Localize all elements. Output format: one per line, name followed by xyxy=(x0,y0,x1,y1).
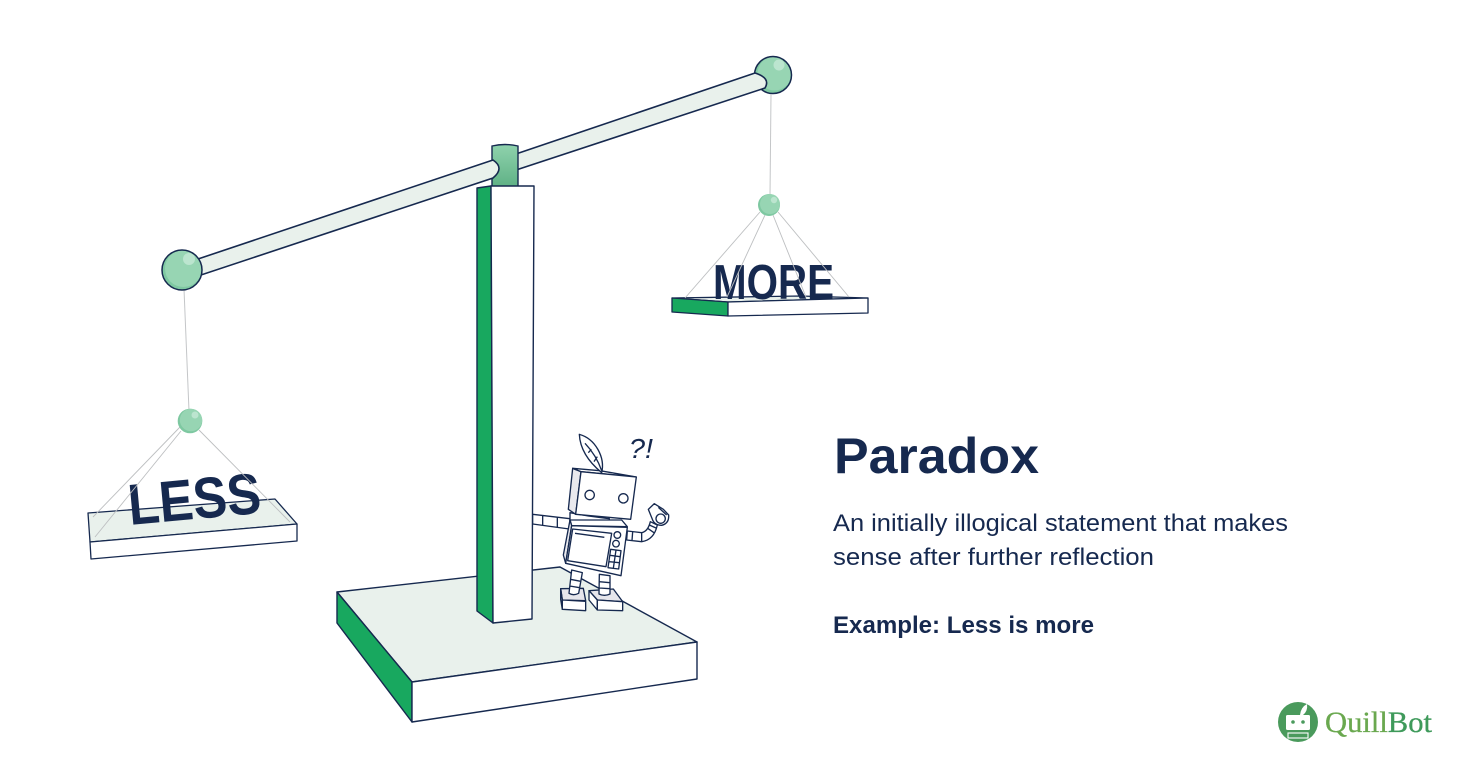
strings: LESS pan xyxy=(93,427,290,537)
scale base xyxy=(337,567,697,722)
word: MORE: MORE xyxy=(713,256,834,310)
definition line two: sense after further reflection xyxy=(833,544,1154,571)
exclamation mark text: ?! xyxy=(629,433,653,464)
robot screen xyxy=(568,529,612,567)
robot right arm xyxy=(627,522,657,542)
pillar xyxy=(477,186,534,623)
QuillBot logo xyxy=(1278,702,1433,742)
robot left foot xyxy=(561,588,586,611)
pan: MORE xyxy=(672,296,868,316)
robot button one xyxy=(614,532,621,538)
right beam arm xyxy=(510,73,767,172)
robot character xyxy=(533,434,669,611)
robot keypad xyxy=(608,549,621,569)
robot neck xyxy=(570,513,609,521)
robot arm reaching to pillar xyxy=(533,514,570,529)
logo badge xyxy=(1278,702,1318,742)
left hanging string xyxy=(184,289,189,411)
right hanging string xyxy=(770,94,771,196)
robot right eye xyxy=(619,494,628,503)
pivot block xyxy=(492,144,518,187)
example line: Example: Less is more xyxy=(833,612,1094,639)
right ball xyxy=(754,56,792,94)
left beam arm xyxy=(195,160,499,276)
heading: Paradox xyxy=(834,428,1039,484)
robot right foot xyxy=(589,589,623,611)
robot hand xyxy=(648,504,669,525)
robot left eye xyxy=(585,490,594,500)
word: LESS: LESS xyxy=(125,461,264,538)
strings: MORE pan xyxy=(685,212,849,298)
robot right leg xyxy=(599,574,610,595)
pan: LESS xyxy=(88,499,297,559)
robot left leg xyxy=(569,570,582,595)
small ball: LESS xyxy=(178,409,202,433)
robot screen line xyxy=(575,533,604,537)
robot feather xyxy=(579,434,602,473)
robot head xyxy=(568,468,636,519)
left ball xyxy=(162,250,202,290)
small ball: MORE xyxy=(758,194,780,216)
robot button two xyxy=(613,540,619,547)
robot torso xyxy=(563,520,627,576)
definition line one: An initially illogical statement that makes xyxy=(833,510,1288,537)
logo wordmark: QuillBot xyxy=(1325,706,1433,739)
text block: definition xyxy=(833,428,1288,639)
